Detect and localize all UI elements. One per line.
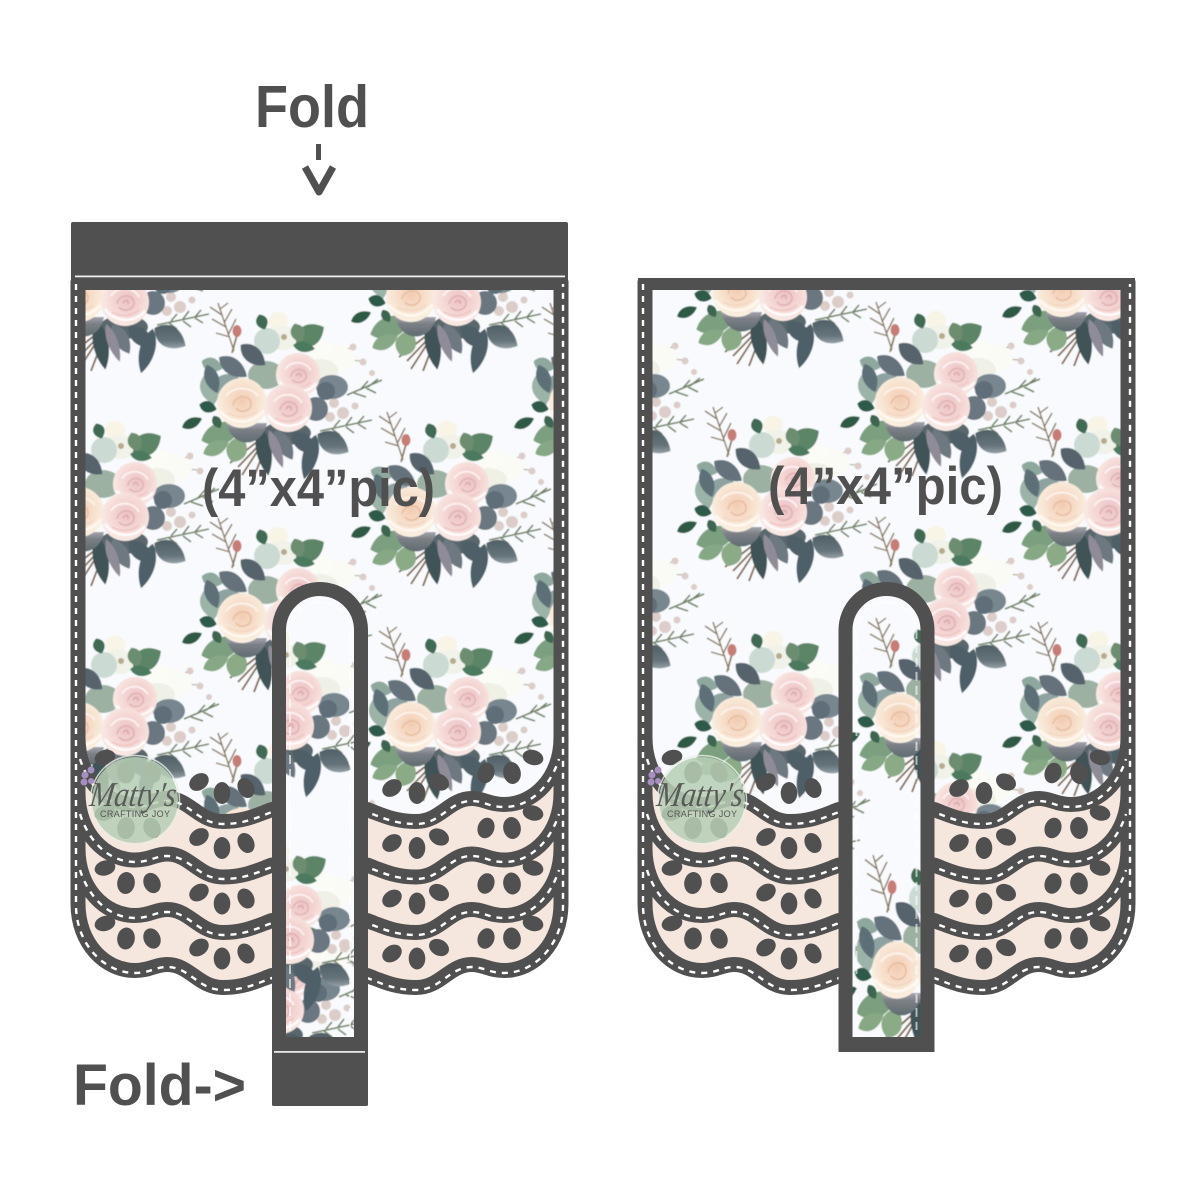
scalloped layers [645,488,1128,988]
center strip frame [846,589,928,1040]
fold line: top [75,276,565,277]
stitching [643,284,1130,990]
center strip frame [279,589,361,1040]
eyelet dots [93,748,545,970]
stitching [76,284,563,990]
panel: left pocket template [70,222,568,1106]
top scallop edge [645,280,1128,822]
heading: Fold arrow label: Fold-> [73,1053,246,1118]
picture area: rose pattern [86,290,554,814]
top frame band [638,278,1135,290]
scalloped layers [78,488,561,988]
center strip picture [852,596,920,1037]
watermark logo [80,756,180,844]
label: picture size: (4”x4”pic) [768,457,1003,516]
center strip picture [286,596,354,1037]
strip bottom band [838,1037,934,1052]
picture area: rose pattern [652,290,1120,814]
top scallop edge [78,280,561,822]
label: picture size: (4”x4”pic) [202,459,435,518]
panel: right pocket template [638,278,1136,1052]
fold tab: strip bottom [272,1037,368,1106]
arrow: fold pointer [305,144,333,192]
fold line: strip [274,1051,365,1053]
watermark logo [648,756,746,844]
heading: Fold: Fold [255,74,369,140]
eyelet dots [660,748,1112,970]
fold tab: top [71,222,568,290]
